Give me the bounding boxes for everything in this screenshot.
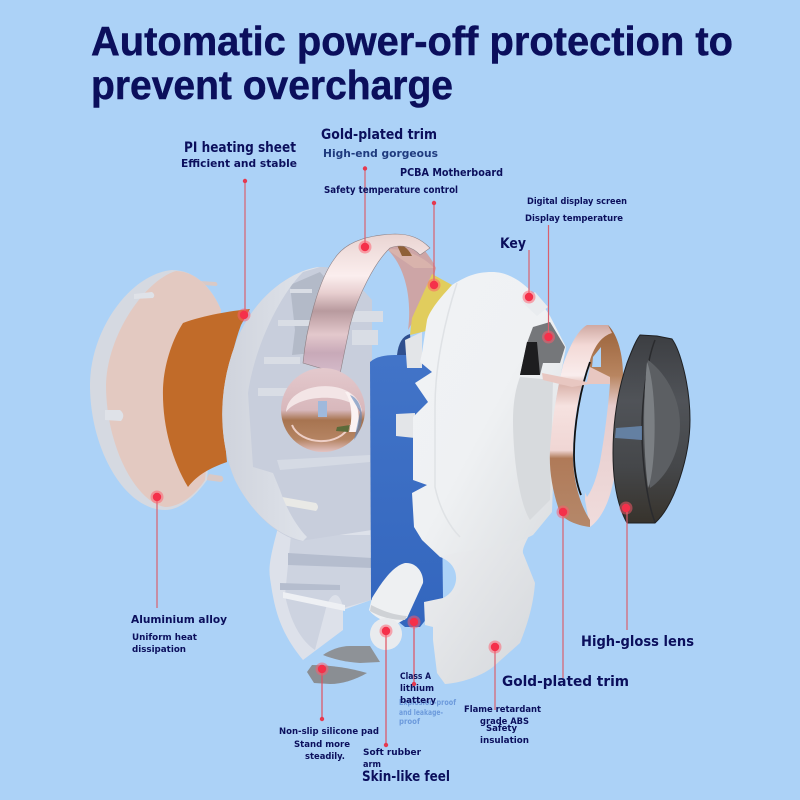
callout: high-gloss lens: High-gloss lens xyxy=(581,634,694,650)
part: PI heating sheet xyxy=(163,309,250,487)
callout: aluminium alloy: Aluminium alloy xyxy=(131,613,227,626)
callout: digital display screen: Digital display screen xyxy=(527,197,627,207)
callout: high-gloss lens xyxy=(581,502,694,650)
callout: soft rubber arm: Soft rubber xyxy=(363,748,422,758)
part: PCBA motherboard xyxy=(410,274,452,335)
callout: digital display screen xyxy=(525,197,627,344)
callout: PCBA motherboard: Safety temperature control xyxy=(324,185,458,196)
callout: gold-plated trim top xyxy=(321,127,438,254)
part: silicone pads xyxy=(307,646,380,684)
callout: key xyxy=(500,236,536,304)
callout: class A lithium battery: proof xyxy=(399,717,420,726)
callout: PCBA motherboard xyxy=(324,167,503,292)
callout: non-slip silicone pad xyxy=(279,662,379,762)
callout: soft rubber arm: Skin-like feel xyxy=(362,769,450,785)
part: right body torso xyxy=(424,520,537,684)
part: soft rubber arm xyxy=(369,563,423,650)
callout: class A lithium battery: Class A xyxy=(400,672,431,682)
part: chrome ball joint xyxy=(281,368,365,452)
callout: PI heating sheet: Efficient and stable xyxy=(181,158,297,170)
title xyxy=(91,18,733,108)
title: prevent overcharge xyxy=(91,62,453,108)
callout: class A lithium battery xyxy=(399,616,456,726)
part: right dome shell xyxy=(396,272,566,557)
part: high-gloss lens xyxy=(613,335,690,523)
callout: non-slip silicone pad: steadily. xyxy=(305,752,345,762)
callout: soft rubber arm xyxy=(362,624,450,785)
part: lithium battery xyxy=(370,334,443,627)
callout: gold-plated trim top: High-end gorgeous xyxy=(323,148,438,160)
callout: aluminium alloy: dissipation xyxy=(132,645,186,655)
callout: class A lithium battery: battery xyxy=(400,696,436,706)
callout: PI heating sheet: PI heating sheet xyxy=(184,140,296,156)
exploded product illustration xyxy=(90,234,690,684)
callout: non-slip silicone pad: Non-slip silicone pad xyxy=(279,727,379,737)
callout: soft rubber arm: arm xyxy=(363,760,381,770)
part: rear ring segment xyxy=(382,235,436,330)
callout: gold-plated trim bottom xyxy=(502,506,629,690)
callout: flame retardant ABS: grade ABS xyxy=(480,717,529,727)
part: aluminium alloy back cap xyxy=(90,270,223,510)
callout: flame retardant ABS xyxy=(464,640,542,746)
callout: PCBA motherboard: PCBA Motherboard xyxy=(400,167,503,179)
part: left body shell xyxy=(222,267,383,660)
callout: gold-plated trim bottom: Gold-plated trim xyxy=(502,674,629,690)
callout: flame retardant ABS: insulation xyxy=(480,736,529,746)
part: gold-plated trim upper band xyxy=(303,234,430,374)
callout: aluminium alloy xyxy=(131,490,227,655)
callout: class A lithium battery: and leakage- xyxy=(399,708,443,717)
part: gold-plated trim front ring xyxy=(542,325,623,527)
callout: gold-plated trim top: Gold-plated trim xyxy=(321,127,437,143)
callout: class A lithium battery: Explosion-proof xyxy=(399,698,456,707)
callout: PI heating sheet xyxy=(181,140,297,322)
callout: digital display screen: Display temperature xyxy=(525,214,623,224)
title: Automatic power-off protection to xyxy=(91,18,733,64)
callout: flame retardant ABS: Flame retardant xyxy=(464,705,542,715)
callout: aluminium alloy: Uniform heat xyxy=(132,633,198,643)
callout: non-slip silicone pad: Stand more xyxy=(294,740,350,750)
callout: key: Key xyxy=(500,236,526,252)
callout: flame retardant ABS: Safety xyxy=(486,724,517,734)
callout: class A lithium battery: lithium xyxy=(400,684,434,694)
